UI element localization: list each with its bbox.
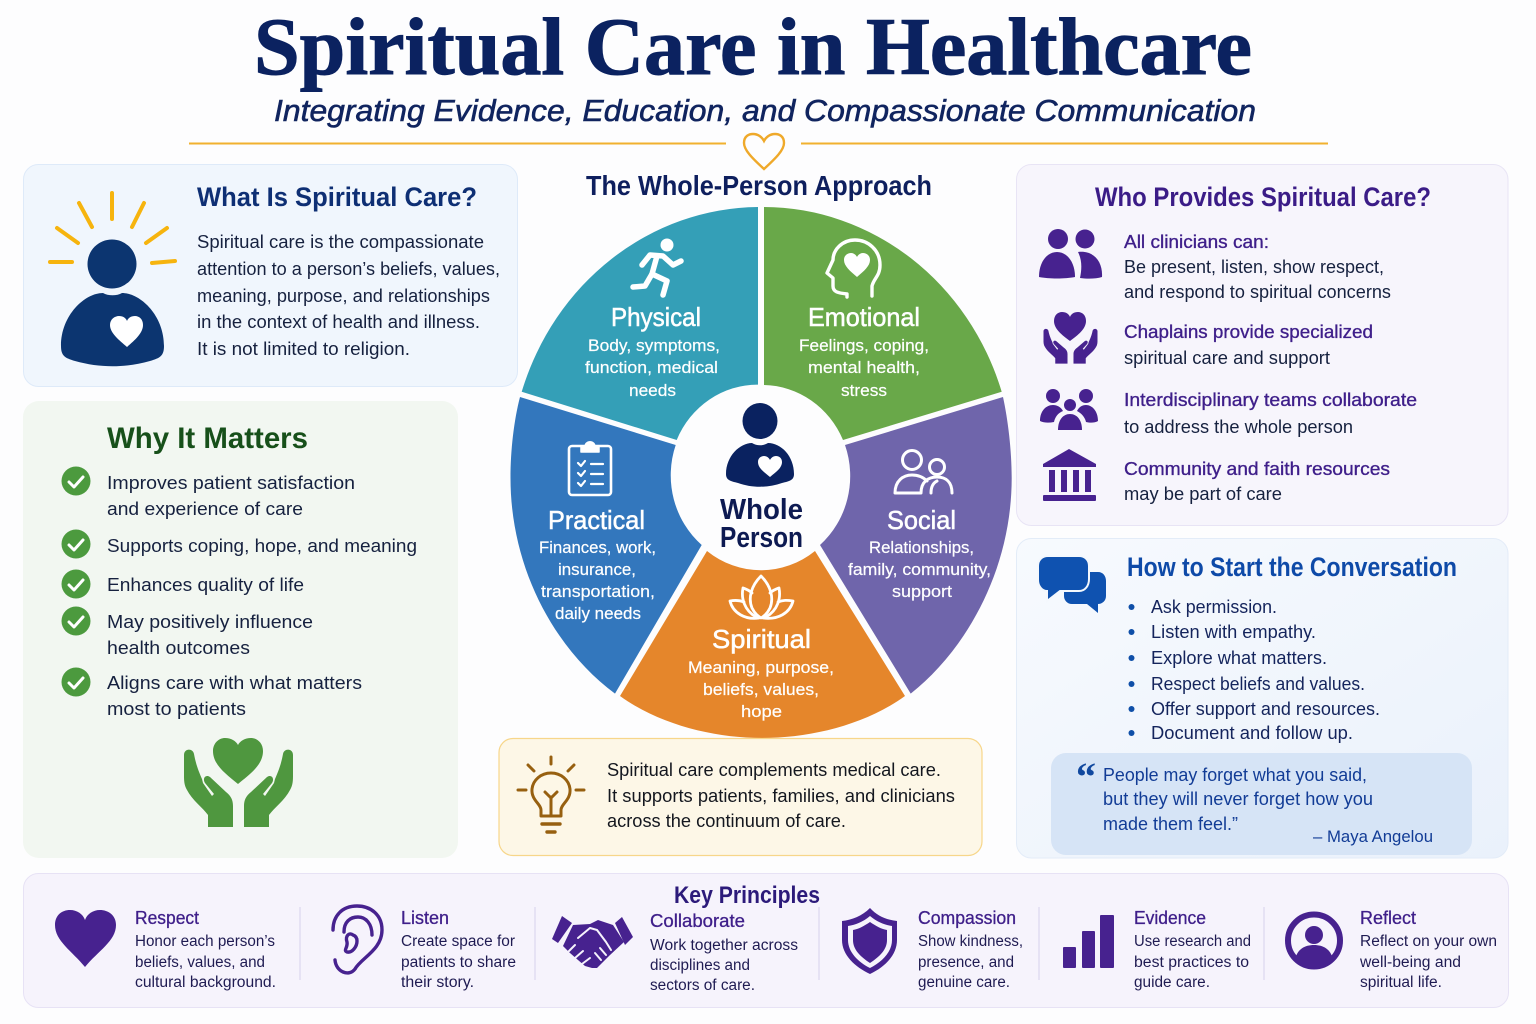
segment: practical: Practical — [548, 505, 645, 535]
segment: physical: Physical — [611, 302, 701, 332]
principle: collaborate: Work together across — [650, 937, 798, 954]
segment: practical: daily needs — [555, 604, 641, 623]
icon: lotus — [730, 576, 793, 618]
icon: two people — [1039, 229, 1102, 279]
benefits list: Aligns care with what matters — [107, 672, 362, 693]
benefits list: Enhances quality of life — [107, 574, 304, 595]
icon: hands and heart — [1044, 312, 1098, 364]
segment: social — [820, 397, 1012, 694]
panel: key principles — [24, 874, 1508, 1008]
benefits list: Supports coping, hope, and meaning — [107, 535, 417, 556]
principle: collaborate: sectors of care. — [650, 977, 755, 994]
community text: Community and faith resources — [1124, 458, 1390, 479]
principle: reflect: well-being and — [1359, 954, 1461, 971]
center: whole person: Whole — [720, 494, 803, 526]
segment: social: Relationships, — [869, 538, 974, 557]
icon: clipboard checklist — [569, 442, 611, 495]
segment: physical: Body, symptoms, — [588, 336, 720, 355]
callout: complements medical care — [499, 738, 982, 856]
icon: head with heart — [827, 240, 880, 297]
benefits list: health outcomes — [107, 637, 250, 658]
clinicians text: All clinicians can: — [1124, 231, 1269, 252]
conversation steps: Explore what matters. — [1151, 647, 1327, 668]
title: Spiritual Care in Healthcare — [254, 1, 1252, 92]
teams text: Interdisciplinary teams collaborate — [1124, 389, 1417, 410]
center: whole person — [720, 403, 803, 554]
principle: reflect: Reflect — [1360, 908, 1416, 928]
segment: spiritual — [620, 551, 905, 738]
principle: respect: beliefs, values, and — [135, 954, 265, 971]
icon: institution — [1043, 449, 1096, 501]
teams text: to address the whole person — [1124, 416, 1353, 437]
chaplains text: Chaplains provide specialized — [1124, 321, 1373, 342]
quote box: – Maya Angelou — [1313, 827, 1433, 846]
segment: emotional: stress — [841, 381, 887, 400]
principle: evidence — [1063, 908, 1251, 991]
icon: lightbulb — [518, 757, 584, 832]
principle: respect: cultural background. — [135, 974, 276, 991]
benefits list — [107, 472, 417, 719]
principle: listen: Create space for — [401, 933, 515, 950]
principle: compassion: Compassion — [918, 908, 1016, 928]
icon: two people — [895, 450, 952, 493]
conversation steps: Ask permission. — [1151, 596, 1277, 617]
quote box: “ — [1076, 754, 1096, 799]
definition text: attention to a person’s beliefs, values, — [197, 258, 500, 279]
check icons — [62, 466, 90, 696]
callout text: across the continuum of care. — [607, 810, 846, 831]
principle: evidence: best practices to — [1134, 954, 1249, 971]
panel: how to start the conversation — [1016, 538, 1508, 858]
segment: practical: insurance, — [558, 560, 636, 579]
clinicians text: Be present, listen, show respect, — [1124, 256, 1384, 277]
principle: compassion: Show kindness, — [918, 933, 1023, 950]
principle: compassion — [842, 908, 1023, 991]
segment: spiritual: hope — [741, 702, 782, 721]
principle: reflect — [1288, 908, 1497, 991]
heading: Who Provides Spiritual Care? — [1095, 182, 1431, 212]
conversation steps: Document and follow up. — [1151, 722, 1353, 743]
heading: How to Start the Conversation — [1127, 552, 1457, 582]
segment: physical: function, medical — [585, 358, 718, 377]
segment: practical — [510, 397, 702, 694]
community text — [1124, 458, 1390, 504]
benefits list: May positively influence — [107, 611, 313, 632]
principle: compassion: genuine care. — [918, 974, 1010, 991]
principle: listen — [333, 906, 516, 991]
segment: emotional: Emotional — [808, 302, 920, 332]
teams text — [1124, 389, 1417, 437]
principle: listen: patients to share — [401, 954, 516, 971]
quote box: but they will never forget how you — [1103, 788, 1373, 809]
principle: collaborate: Collaborate — [650, 911, 745, 931]
chaplains text: spiritual care and support — [1124, 347, 1330, 368]
segment: social: Social — [887, 505, 956, 535]
callout text: It supports patients, families, and clinicians — [607, 785, 955, 806]
callout text — [607, 759, 955, 831]
principle: evidence: Evidence — [1134, 908, 1206, 928]
principle: evidence: Use research and — [1134, 933, 1251, 950]
segment: emotional: mental health, — [808, 358, 920, 377]
definition text: meaning, purpose, and relationships — [197, 285, 490, 306]
benefits list: most to patients — [107, 698, 246, 719]
center: whole person: Person — [720, 522, 803, 554]
panel: who provides spiritual care — [1016, 164, 1508, 526]
conversation steps — [1128, 596, 1380, 743]
segment: social: family, community, — [848, 560, 991, 579]
conversation steps: Listen with empathy. — [1151, 621, 1316, 642]
segment: physical — [522, 207, 758, 440]
segment: emotional: Feelings, coping, — [799, 336, 929, 355]
principle: collaborate — [552, 911, 798, 994]
heading: Why It Matters — [107, 422, 308, 455]
principle: collaborate: disciplines and — [650, 957, 750, 974]
segment: emotional — [764, 207, 1002, 440]
chaplains text — [1124, 321, 1373, 368]
panel: what is spiritual care — [24, 164, 518, 386]
segment: spiritual: Meaning, purpose, — [688, 658, 834, 677]
segment: social: support — [892, 582, 952, 601]
conversation steps: Respect beliefs and values. — [1151, 673, 1365, 694]
conversation steps: Offer support and resources. — [1151, 698, 1380, 719]
segment: practical: Finances, work, — [539, 538, 656, 557]
quote box — [1051, 753, 1472, 855]
chart: whole-person wheel — [510, 207, 1012, 738]
benefits list: Improves patient satisfaction — [107, 472, 355, 493]
icon: person with radiating light and heart — [50, 193, 175, 366]
segment: spiritual: beliefs, values, — [703, 680, 819, 699]
quote box: People may forget what you said, — [1103, 764, 1367, 785]
benefits list: and experience of care — [107, 498, 303, 519]
principle: respect: Respect — [135, 908, 199, 928]
principle: reflect: Reflect on your own — [1360, 933, 1497, 950]
segment: physical: needs — [629, 381, 676, 400]
icon: runner — [633, 238, 681, 295]
segment: spiritual: Spiritual — [712, 624, 811, 654]
principle: evidence: guide care. — [1134, 974, 1210, 991]
definition text: Spiritual care is the compassionate — [197, 231, 484, 252]
principle: respect: Honor each person’s — [135, 933, 275, 950]
principle: reflect: spiritual life. — [1360, 974, 1442, 991]
icon: chat bubbles — [1038, 556, 1106, 613]
heading: whole-person approach: The Whole-Person Approach — [586, 170, 932, 201]
icon: team of three — [1040, 389, 1098, 430]
icon: hands holding heart — [184, 738, 293, 827]
subtitle: Integrating Evidence, Education, and Compassionate Communication — [274, 93, 1256, 128]
quote box: made them feel.” — [1103, 813, 1238, 834]
principle: compassion: presence, and — [918, 954, 1014, 971]
heading: What Is Spiritual Care? — [197, 182, 477, 212]
community text: may be part of care — [1124, 483, 1282, 504]
panel: why it matters — [23, 401, 458, 858]
callout text: Spiritual care complements medical care. — [607, 759, 941, 780]
definition text: It is not limited to religion. — [197, 338, 410, 359]
header divider with heart — [189, 134, 1328, 169]
definition text — [197, 231, 500, 359]
heading: Key Principles — [674, 882, 820, 909]
clinicians text — [1124, 231, 1391, 302]
definition text: in the context of health and illness. — [197, 311, 480, 332]
segment: practical: transportation, — [541, 582, 655, 601]
principle: listen: their story. — [401, 974, 474, 991]
clinicians text: and respond to spiritual concerns — [1124, 281, 1391, 302]
principle: listen: Listen — [401, 908, 449, 928]
principle: respect — [55, 908, 276, 991]
